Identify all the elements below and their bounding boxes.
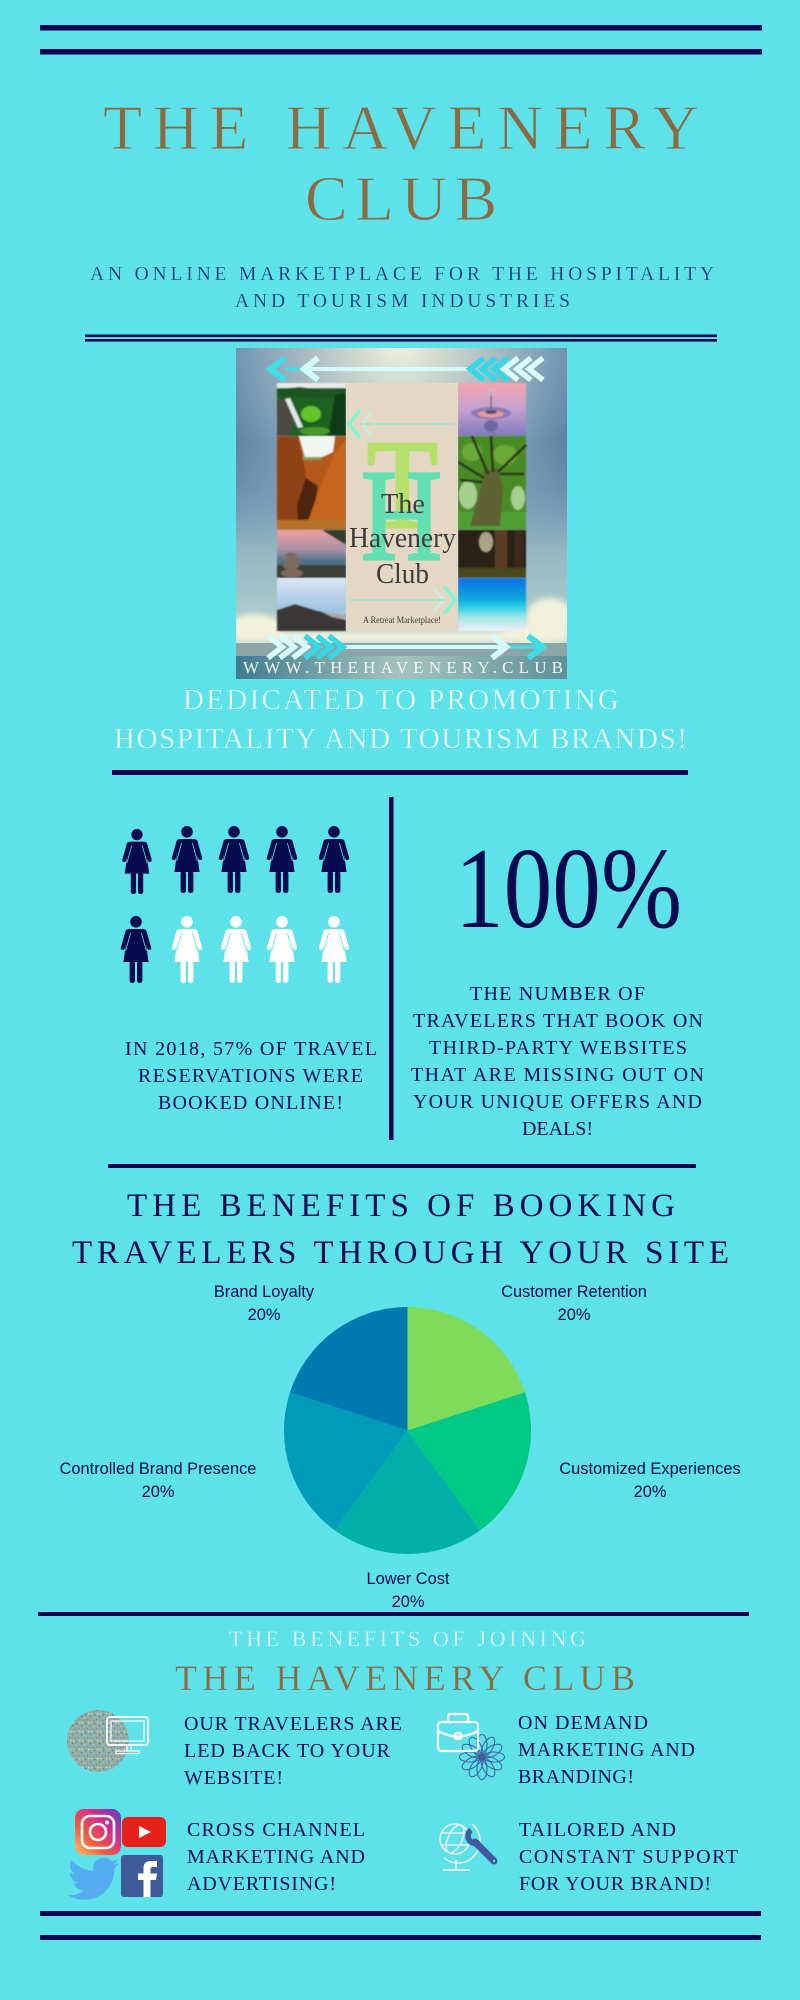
photo: stacked stones: [277, 530, 346, 578]
panel arrows: [348, 410, 455, 614]
icon: glitter globe and monitor: [67, 1710, 148, 1772]
globe: [440, 1822, 480, 1870]
heading: benefits of joining: THE BENEFITS OF JOINING: [229, 1626, 586, 1651]
row one figures: [124, 826, 347, 894]
pictogram: 57% of travelers: [123, 826, 347, 983]
wrench: [468, 1830, 495, 1862]
pie label: customized experiences: 20%: [634, 1483, 666, 1501]
title: CLUB: [305, 163, 497, 234]
vertical divider: [389, 797, 394, 1140]
subtitle: [90, 264, 714, 312]
subtitle: AN ONLINE MARKETPLACE FOR THE HOSPITALITY: [90, 264, 714, 285]
statistic text: third-party websites: THIRD-PARTY WEBSITES: [429, 1037, 687, 1059]
photo: forest: [458, 530, 526, 578]
statistic text: third-party websites: THAT ARE MISSING OUT ON: [411, 1064, 704, 1086]
statistic text: 57% booked online: BOOKED ONLINE!: [158, 1092, 343, 1114]
benefit text: led back to website: WEBSITE!: [184, 1767, 283, 1789]
heading: benefits of booking: THE BENEFITS OF BOOKING: [127, 1188, 675, 1224]
pie label: customized experiences: [559, 1460, 741, 1501]
heading: benefits of booking: TRAVELERS THROUGH YOUR SITE: [72, 1235, 729, 1271]
hero image: retreat marketplace collage: [229, 348, 574, 679]
rule under tagline: [112, 770, 688, 775]
logo letter T: T: [367, 416, 438, 555]
statistic text: third-party websites: THE NUMBER OF: [470, 983, 645, 1005]
top double rule: [40, 25, 762, 54]
pie label: lower cost: Lower Cost: [367, 1570, 450, 1588]
pie label: customer retention: Customer Retention: [501, 1283, 647, 1301]
statistic text: third-party websites: YOUR UNIQUE OFFERS AND: [413, 1091, 702, 1113]
benefit text: led back to website: OUR TRAVELERS ARE: [184, 1713, 402, 1735]
rule above benefits: [108, 1164, 696, 1168]
benefit text: on demand marketing: MARKETING AND: [518, 1739, 695, 1761]
statistic text: 57% booked online: RESERVATIONS WERE: [138, 1065, 363, 1087]
benefit text: tailored support: CONSTANT SUPPORT: [519, 1846, 738, 1868]
photo: mountain: [277, 578, 346, 631]
pie label: brand loyalty: 20%: [248, 1306, 280, 1324]
icon: globe and wrench: [440, 1822, 495, 1870]
tagline: DEDICATED TO PROMOTING: [183, 684, 619, 716]
pie chart: benefits: [284, 1307, 531, 1554]
statistic text: 57% booked online: IN 2018, 57% OF TRAVEL: [125, 1038, 377, 1060]
bottom arrow: [268, 636, 543, 658]
tagline: HOSPITALITY AND TOURISM BRANDS!: [114, 723, 687, 755]
rule above joining: [38, 1612, 749, 1616]
benefit text: tailored support: TAILORED AND: [519, 1819, 676, 1841]
photo: canyon: [277, 436, 346, 530]
statistic text: third-party websites: [411, 983, 704, 1140]
sky background: [229, 348, 574, 679]
statistic text: third-party websites: TRAVELERS THAT BOOK ON: [413, 1010, 703, 1032]
big number: 100%: [455, 825, 682, 952]
pie label: customer retention: [501, 1283, 647, 1324]
statistic text: third-party websites: DEALS!: [522, 1118, 593, 1140]
pie label: controlled brand presence: Controlled Brand Presence: [60, 1460, 256, 1478]
pie label: controlled brand presence: [60, 1460, 256, 1501]
photo: tree: [458, 436, 526, 530]
pie label: brand loyalty: [214, 1283, 315, 1324]
benefit text: cross channel marketing: MARKETING AND: [187, 1846, 365, 1868]
photo: sea: [458, 578, 526, 631]
benefit text: cross channel marketing: ADVERTISING!: [187, 1873, 336, 1895]
pie label: customer retention: 20%: [558, 1306, 590, 1324]
facebook: [121, 1855, 163, 1897]
photo: waterfall: [277, 383, 346, 436]
pie label: customized experiences: Customized Experiences: [559, 1460, 741, 1478]
logo wordmark: Club: [376, 558, 429, 590]
statistic text: 57% booked online: [125, 1038, 377, 1114]
icon: briefcase and flower: [438, 1714, 504, 1780]
tagline: [114, 684, 687, 755]
logo wordmark: Havenery: [349, 522, 456, 554]
logo letter H: H: [361, 444, 442, 588]
heading: the havenery club: THE HAVENERY CLUB: [175, 1658, 635, 1698]
row two figures: [123, 916, 347, 983]
pie label: brand loyalty: Brand Loyalty: [214, 1283, 315, 1301]
pie label: lower cost: [367, 1570, 450, 1611]
logo wordmark: [349, 488, 456, 590]
title: THE HAVENERY: [103, 92, 699, 163]
benefit text: led back to website: LED BACK TO YOUR: [184, 1740, 391, 1762]
photo: water droplet: [458, 383, 526, 436]
twitter: [68, 1858, 120, 1900]
logo panel: [346, 383, 458, 631]
subtitle: AND TOURISM INDUSTRIES: [235, 291, 570, 312]
youtube: [122, 1817, 166, 1847]
benefit text: on demand marketing: BRANDING!: [518, 1766, 634, 1788]
icon: social media logos: [68, 1809, 166, 1900]
benefit text: cross channel marketing: CROSS CHANNEL: [187, 1819, 365, 1841]
pie label: lower cost: 20%: [392, 1593, 424, 1611]
pie label: controlled brand presence: 20%: [142, 1483, 174, 1501]
benefit text: on demand marketing: ON DEMAND: [518, 1712, 648, 1734]
benefit text: led back to website: [184, 1713, 402, 1789]
instagram: [75, 1809, 121, 1855]
double rule under subtitle: [85, 334, 717, 342]
benefit text: tailored support: FOR YOUR BRAND!: [519, 1873, 711, 1895]
flower: [460, 1734, 504, 1780]
benefit text: cross channel marketing: [187, 1819, 365, 1895]
benefit text: tailored support: [519, 1819, 738, 1895]
title: [103, 92, 699, 234]
logo wordmark: The: [381, 488, 425, 520]
bottom double rule: [40, 1911, 761, 1940]
briefcase: [438, 1714, 478, 1751]
benefit text: on demand marketing: [518, 1712, 695, 1788]
heading: benefits of booking: [72, 1188, 729, 1271]
website url: WWW.THEHAVENERY.CLUB: [243, 658, 563, 677]
logo tagline: A Retreat Marketplace!: [363, 616, 441, 626]
top arrow: [270, 358, 543, 380]
